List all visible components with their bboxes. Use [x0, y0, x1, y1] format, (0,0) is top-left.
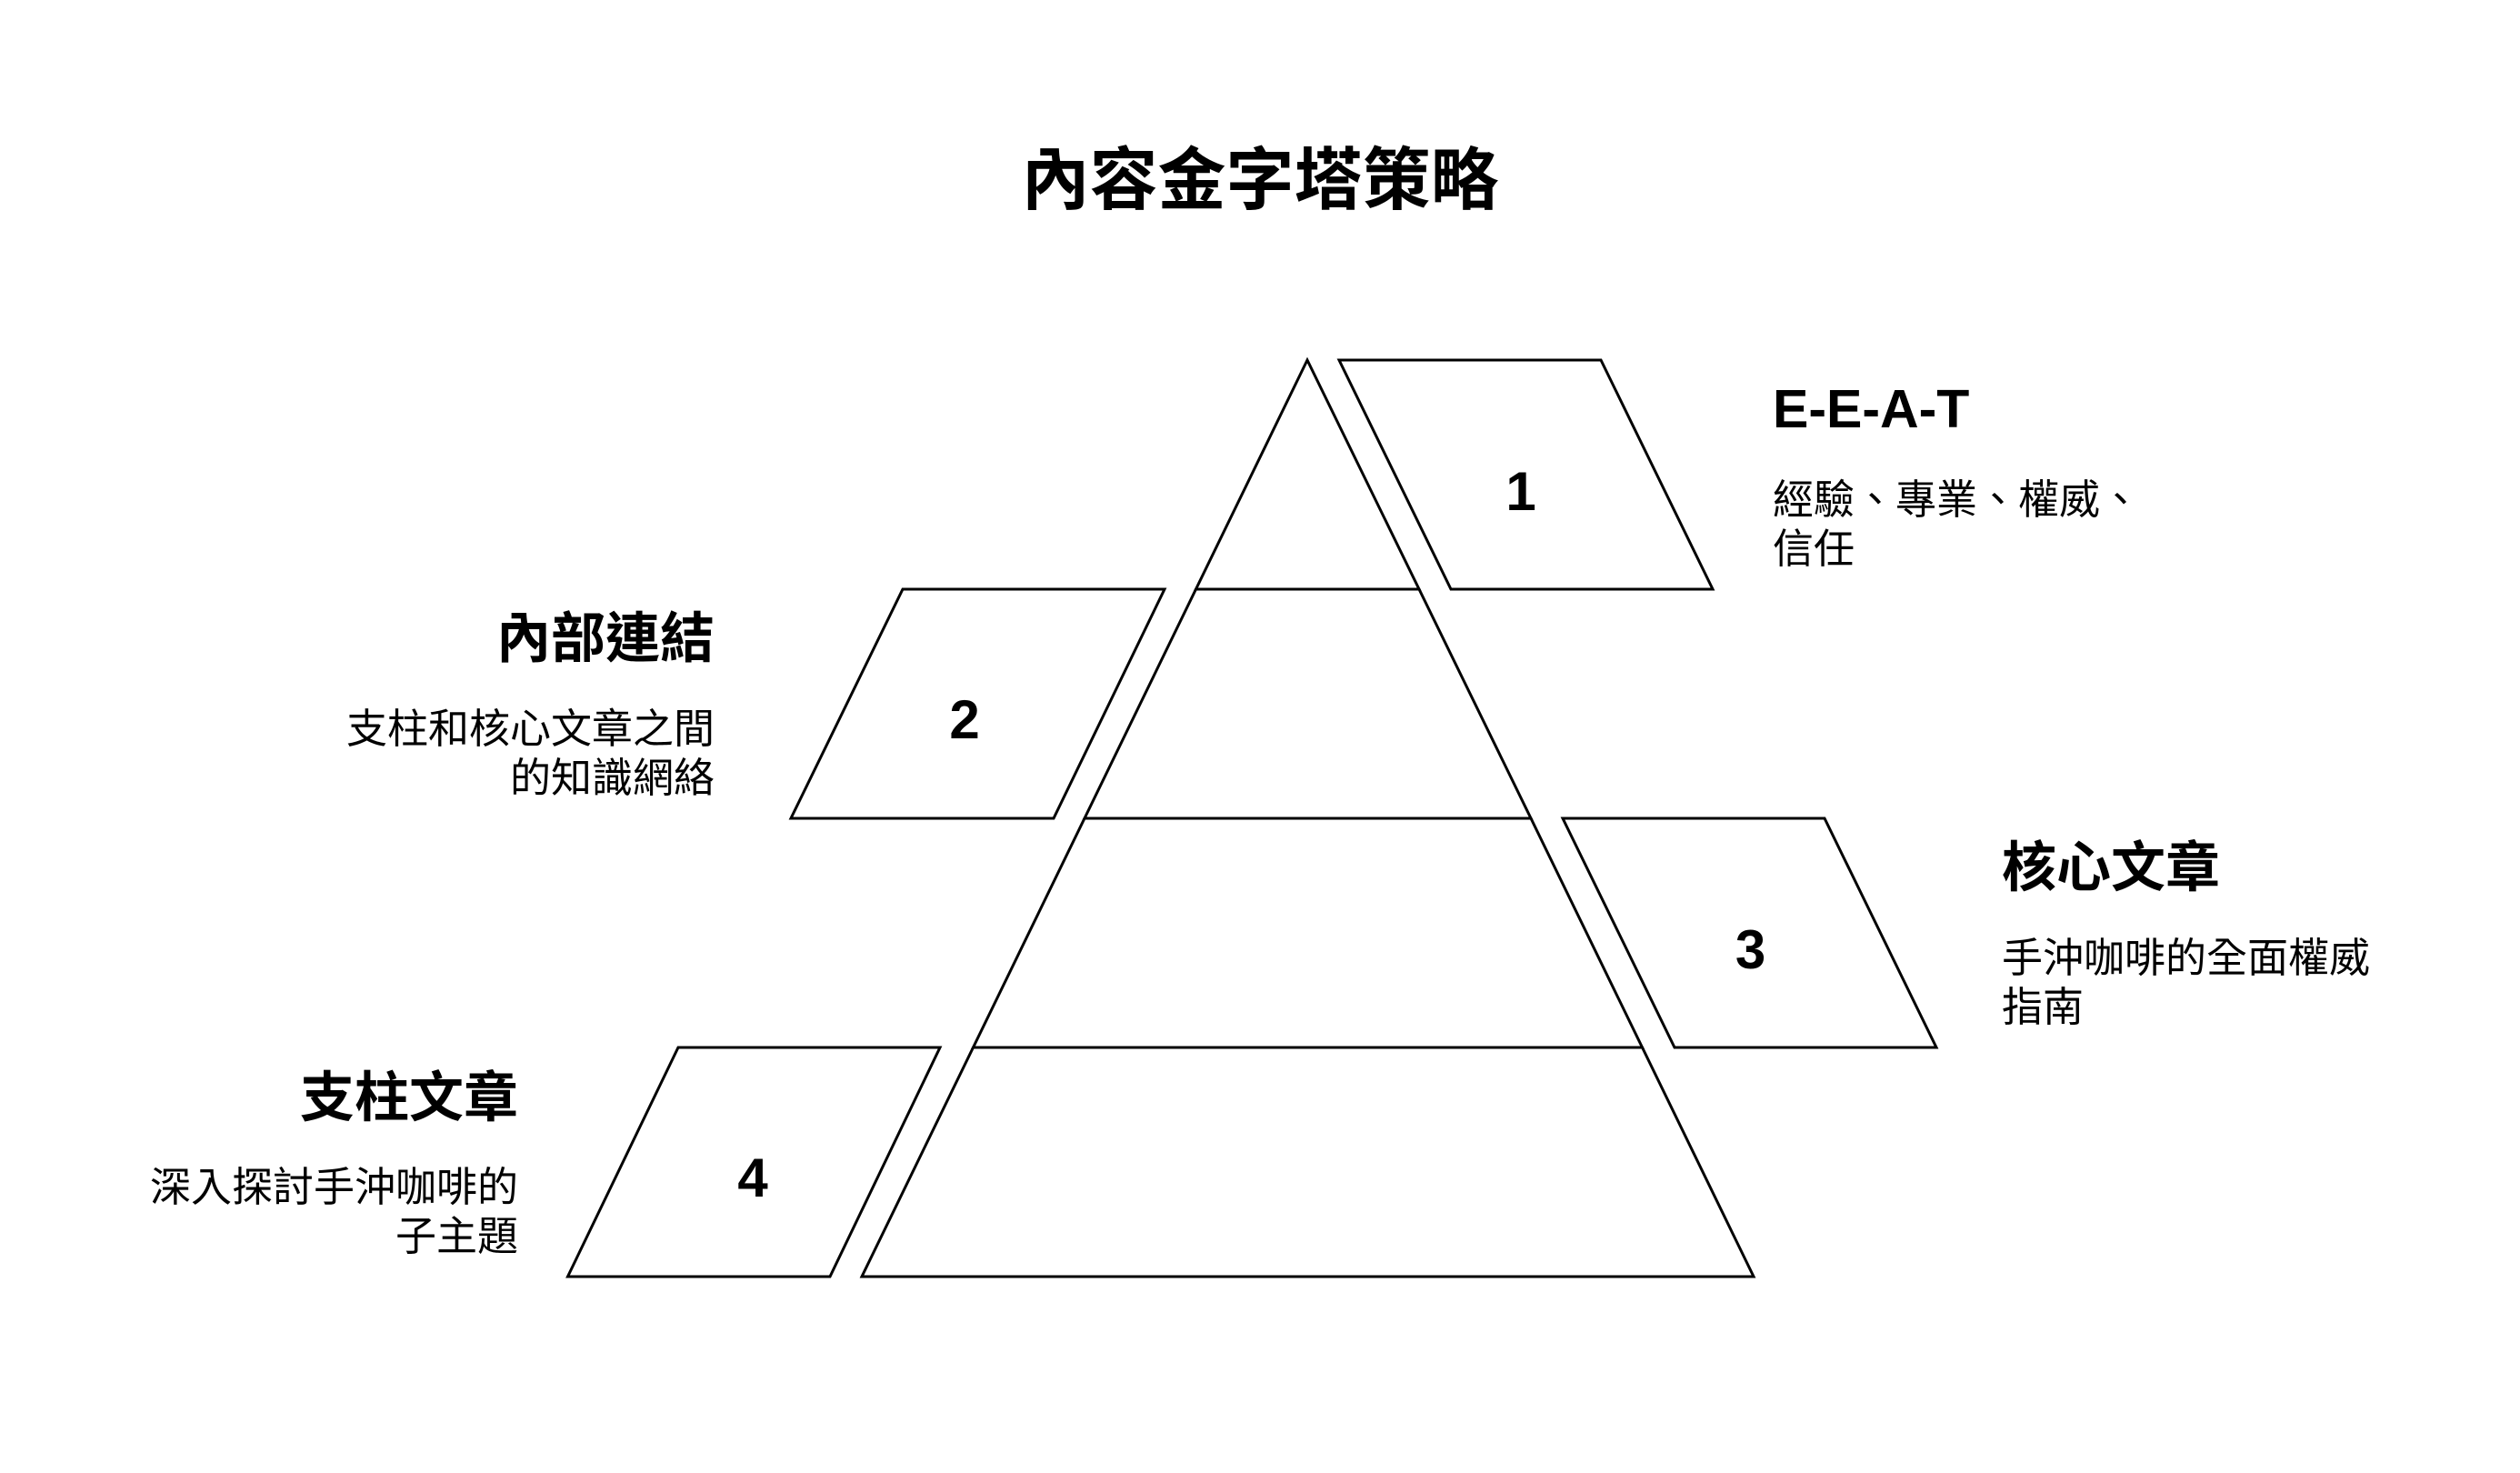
number 3: 3 [1735, 919, 1765, 980]
number 2: 2 [949, 689, 980, 750]
description: pillar article: 深入探討手沖咖啡的 [150, 1164, 518, 1210]
pyramid tier 2 [1085, 589, 1531, 818]
text block: pillar article [150, 1067, 518, 1259]
description: internal links: 支柱和核心文章之間 [346, 706, 715, 752]
parallelogram 1 [1339, 360, 1713, 589]
panel: step 4 [567, 1047, 940, 1277]
heading: core article: 核心文章 [2002, 837, 2220, 898]
pyramid tier 3 [973, 818, 1642, 1047]
heading: E-E-A-T: E-E-A-T [1773, 379, 1969, 439]
number 1: 1 [1505, 461, 1536, 522]
pyramid tier 1 [1196, 360, 1419, 589]
panel: step 2 [791, 589, 1165, 818]
description: internal links: 的知識網絡 [510, 755, 715, 801]
description: E-E-A-T: 信任 [1773, 526, 1855, 572]
parallelogram 3 [1563, 818, 1936, 1047]
text block: core article [2002, 837, 2370, 1030]
panel: step 3 [1563, 818, 1936, 1047]
description: E-E-A-T: 經驗、專業、權威、 [1773, 476, 2141, 523]
title: 內容金字塔策略 [1021, 142, 1499, 218]
panel: step 1 [1339, 360, 1713, 589]
heading: internal links: 內部連結 [496, 608, 715, 669]
heading: pillar article: 支柱文章 [300, 1067, 518, 1128]
parallelogram 2 [791, 589, 1165, 818]
description: core article: 指南 [2002, 984, 2084, 1030]
number 4: 4 [737, 1147, 768, 1208]
text block: internal links [346, 608, 715, 801]
text block: E-E-A-T [1773, 379, 2141, 572]
pyramid tier 4 [862, 1047, 1754, 1277]
description: pillar article: 子主題 [395, 1213, 518, 1259]
pyramid [862, 360, 1754, 1277]
parallelogram 4 [567, 1047, 940, 1277]
description: core article: 手沖咖啡的全面權威 [2002, 935, 2370, 981]
